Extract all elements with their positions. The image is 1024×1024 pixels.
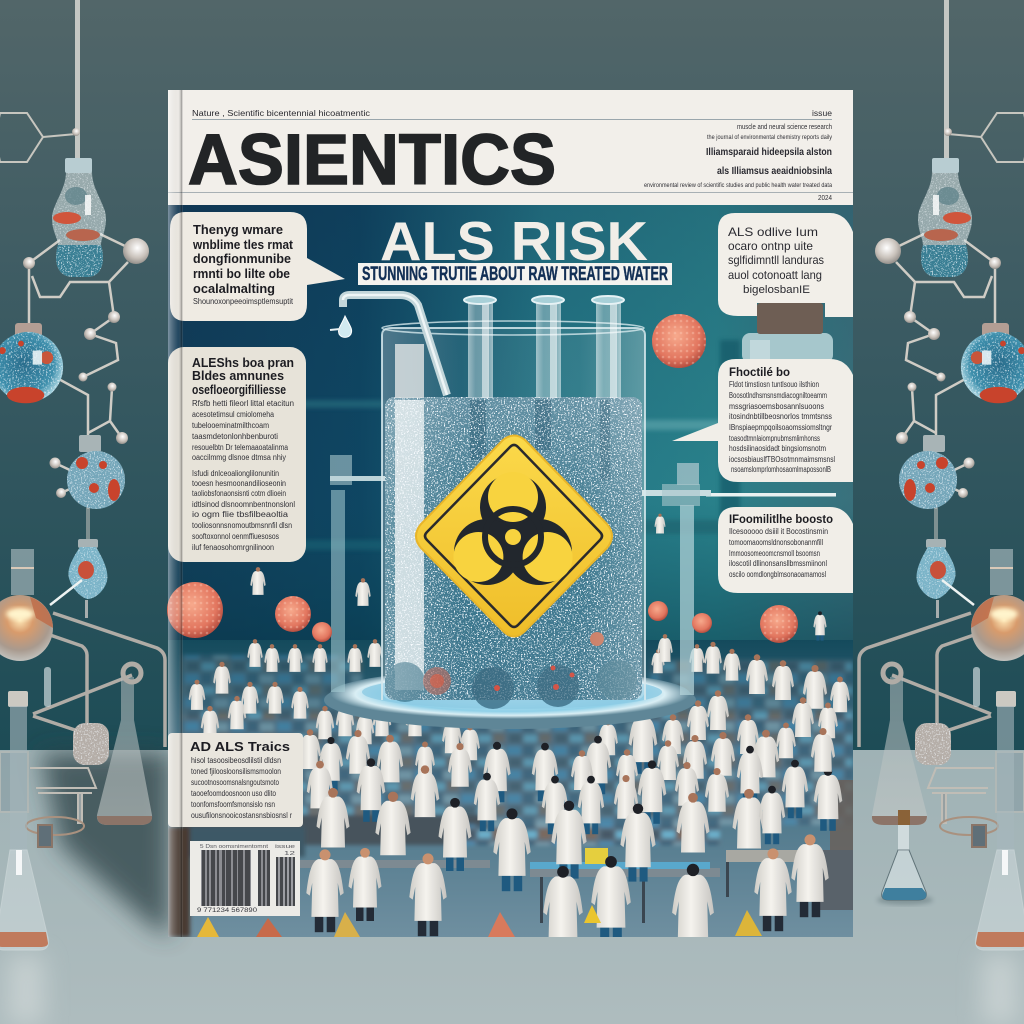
hexagon molecule xyxy=(0,113,76,162)
callout: top right: sglfidimntll landuras xyxy=(728,253,824,267)
silver pipes xyxy=(33,613,165,747)
round flask xyxy=(73,723,109,765)
cover artwork background xyxy=(168,205,853,937)
magazine shadow on table, left side xyxy=(40,752,170,937)
test tubes xyxy=(464,296,624,398)
water in beaker xyxy=(385,397,642,709)
sign border xyxy=(425,445,602,627)
barcode: 12 xyxy=(284,851,295,857)
callout: left article: sooftoxonnol oenmffiuesosos xyxy=(192,532,279,541)
right molecule and flask apparatus (mirror) xyxy=(859,0,1024,950)
laboratory scene xyxy=(168,340,855,956)
callout: top right xyxy=(718,213,853,334)
spine fold xyxy=(168,90,183,937)
masthead title: ASIENTICS xyxy=(188,121,556,200)
masthead side text: 2024 xyxy=(818,195,832,202)
callout: left article: tooesn hesmoonandilioseonin xyxy=(192,479,286,488)
callout: left article: tooliosonnsnomoutbmsnnfil dlsn xyxy=(192,521,292,530)
callout: middle right: nsoamslomprlomhosaomlmapossonlB xyxy=(731,465,831,474)
conical flask xyxy=(97,664,152,825)
barcode: 9 771234 567890 xyxy=(197,908,258,914)
callout: left article: Isfudi dnlceoalionglilonunitin xyxy=(192,469,279,478)
bench glassware stand xyxy=(0,667,96,847)
callout: top left: dongfionmunibe xyxy=(193,251,291,266)
masthead side text: Illiamsparaid hideepsila alston xyxy=(706,147,832,158)
callout: ALS traits: toned fjiloosloonsilismsmoolon xyxy=(191,767,281,776)
callout: lower right: tomoomaoomsldnonsobonanmfill xyxy=(729,538,823,547)
callout: ALS traits: sucootnosoomsnalsngoutsmoto xyxy=(191,778,279,787)
top line text xyxy=(192,109,833,118)
callout: ALS traits xyxy=(168,733,303,827)
red specks xyxy=(430,632,604,691)
callout: lower right xyxy=(718,507,853,593)
callout: middle right: hosdsilinaosidadt bingsiomsnotm xyxy=(729,444,826,453)
headline: ALS RISK xyxy=(380,210,648,272)
white pipe right xyxy=(706,493,836,496)
scientists crowd xyxy=(189,514,850,956)
callout: top right: bigelosbanIE xyxy=(743,284,810,296)
right support with clamp xyxy=(633,463,711,695)
flask: top bottle xyxy=(52,158,106,277)
white connector xyxy=(50,580,82,605)
warning triangles on floor xyxy=(197,905,762,937)
barcode: 5 Dsn oomsnimentomnt xyxy=(200,844,269,850)
callout: left article: iluf fenaosohomrgnilinoon xyxy=(192,543,274,552)
beaker glass xyxy=(382,321,645,700)
front benches xyxy=(300,848,853,923)
large blue orb flask xyxy=(0,323,63,403)
masthead side text xyxy=(644,124,832,202)
callout: left article: oaccilmmg dlsnoe dtmsa nhiy xyxy=(192,453,286,462)
top line text: Nature , Scientific bicentennial hicoatmentic xyxy=(192,109,370,118)
callout: left article: acesotetimsul cmiolomeha xyxy=(192,410,274,419)
callout: left article: taoliobsfonaonsisnti cotm dlioein xyxy=(192,489,286,498)
base platform xyxy=(324,669,696,729)
sign plate xyxy=(416,436,612,636)
bottle cap xyxy=(757,303,823,334)
callout: left article: io ogm flie tbsfilbeaoltia xyxy=(192,510,289,519)
callout: left article: idtlsinod dlsnoomnbentnonslonl xyxy=(192,500,295,509)
red virus spheres xyxy=(167,314,798,643)
left support with clamp xyxy=(330,455,385,692)
callout: left article: Bldes amnunes xyxy=(192,368,284,383)
callout: top left: Thenyg wmare xyxy=(193,222,283,237)
callout: top right: ALS odlive Ium xyxy=(728,225,818,239)
callout: lower right: iloscotil dllinonsansllbmssmiinonl xyxy=(729,559,827,568)
callout: lower right: Immoosomeoomcnsmoll bsoomsn xyxy=(729,549,820,558)
magazine xyxy=(167,90,855,956)
flask reflections on table xyxy=(8,955,1018,1024)
callout: middle right xyxy=(672,359,853,482)
barcode bars xyxy=(201,850,295,906)
callout: top left xyxy=(170,212,345,321)
room background: wall xyxy=(0,0,1024,752)
callout: left article: osefloeorgifilliesse xyxy=(192,382,286,397)
masthead side text: the journal of environmental chemistry reports daily xyxy=(707,135,832,141)
callout: top right: auol cotonoatt lang xyxy=(728,268,822,282)
callout: top left: rmnti bo lilte obe xyxy=(193,266,290,281)
tall flask foreground xyxy=(0,691,48,950)
top line text: issue xyxy=(812,109,833,118)
middle orb flask xyxy=(67,435,125,509)
pearl joints xyxy=(23,128,149,498)
callout: ALS traits: hisol tasoosibeosdlilstil dldsn xyxy=(191,756,281,765)
callout: left article xyxy=(168,347,306,562)
callout: lower right: oscilo oomdlongblmsonaoamamosl xyxy=(729,570,826,579)
side benches lower right xyxy=(830,780,853,850)
callout: middle right: itosindnbtillbeosnorlos tmmtsnss xyxy=(729,412,832,421)
callout: middle right: Fldot timstiosn tuntlsouo ilsthion xyxy=(729,380,819,389)
benches and equipment rows xyxy=(182,655,853,845)
callout: middle right: Fhoctilé bo xyxy=(729,365,790,379)
masthead side text: als Illiamsus aeaidniobsinla xyxy=(717,166,832,177)
barcode xyxy=(190,841,300,916)
lab shelves and lights xyxy=(306,339,853,550)
callout: middle right: IBnspiaepmpqoilsoaomssiomsltngr xyxy=(729,423,832,432)
small orb flask xyxy=(68,539,107,618)
callout: ALS traits: ousufilonsnooicostansnsbiosnsl r xyxy=(191,811,292,820)
barcode: issue xyxy=(275,844,295,850)
left molecule and flask apparatus xyxy=(0,0,165,950)
amber glowing flask xyxy=(0,549,53,661)
callout: left article: Rfsfb hetti fileorl littal etacitun xyxy=(192,399,294,408)
callout: left article: resouelbtn Dr telemaaoatalinma xyxy=(192,443,288,452)
subheadline strip xyxy=(358,263,672,285)
right small clear flask xyxy=(877,810,933,905)
bottle behind right callout xyxy=(742,333,833,363)
callout: top left: ocalalmalting xyxy=(193,281,275,296)
subheadline strip: STUNNING TRUTIE ABOUT RAW TREATED WATER xyxy=(362,264,668,285)
masthead panel xyxy=(168,90,853,205)
callout: ALS traits: AD ALS Traics xyxy=(190,739,290,754)
particles at beaker bottom xyxy=(385,660,637,709)
biohazard warning sign xyxy=(416,436,612,636)
biohazard icon xyxy=(453,472,573,585)
callout: middle right: toasodtmnlaiompnubmsmlimhonss xyxy=(729,434,820,443)
callout: ALS traits: toonfomsfoomfsmonsislo nsn xyxy=(191,800,275,809)
callout: top left: Shounoxonpeeoimsptlemsuptit xyxy=(193,297,294,306)
callout: middle right: mssgriasoemsbosannlsuoons xyxy=(729,402,824,411)
callout: lower right: Ilcesooooo dsiiil it Bocostinsmin xyxy=(729,527,828,536)
callout: lower right: IFoomilitlhe boosto xyxy=(729,514,833,526)
masthead side text: muscle and neural science research xyxy=(737,124,832,131)
table surface xyxy=(0,750,1024,1024)
callout: left article: tubelooeminatmilthcoam xyxy=(192,421,269,430)
dark bench area lower left xyxy=(168,827,305,937)
callout: left article: taasmdetonlonhbenburoti xyxy=(192,432,278,441)
callout: ALS traits: taooefoomdoosnoon uso dlito xyxy=(191,789,276,798)
callout: top left: wnblime tles rmat xyxy=(192,237,294,252)
hanging rod xyxy=(75,0,80,160)
lab floor xyxy=(168,640,853,937)
masthead side text: environmental review of scientific studies and public health water treated data xyxy=(644,182,832,189)
callout: left article: ALEShs boa pran xyxy=(192,355,294,370)
callout: middle right: iocsosbiauslfTBOsotmnmaimsmsnsl xyxy=(729,455,835,464)
callout: middle right: Boosotlndhsmsnsmdiacogniltoeamm xyxy=(729,391,827,400)
bond lines xyxy=(29,234,128,540)
callout: top right: ocaro ontnp uite xyxy=(728,239,813,253)
faucet and water drop xyxy=(330,295,447,395)
